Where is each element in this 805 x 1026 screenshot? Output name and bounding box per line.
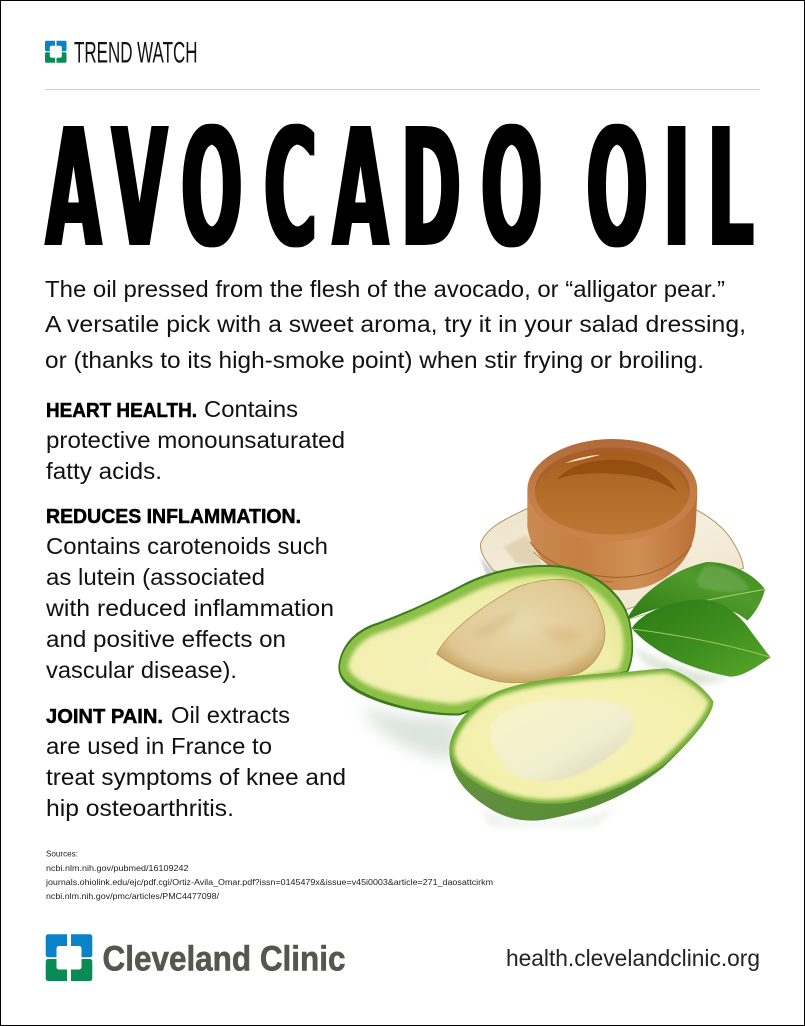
sources <box>45 848 493 901</box>
text block: heart health <box>46 396 345 484</box>
text block: heart health: Contains <box>204 396 298 422</box>
logo: Cleveland Clinic mark <box>46 933 92 982</box>
text block: heart health: fatty acids. <box>46 458 162 484</box>
intro text: The oil pressed from the flesh of the avocado, or “alligator pear.” <box>45 276 725 302</box>
avocado half with empty pit <box>449 669 713 821</box>
avocado half with seed <box>338 565 633 715</box>
text block: reduces inflammation: REDUCES INFLAMMATION. <box>46 505 301 528</box>
text block: joint pain: Oil extracts <box>171 702 290 728</box>
text block: reduces inflammation <box>45 505 334 683</box>
sources: ncbi.nlm.nih.gov/pubmed/16109242 <box>46 863 189 873</box>
wooden bowl <box>527 439 697 590</box>
text block: reduces inflammation: with reduced inflammation <box>45 595 334 621</box>
text block: reduces inflammation: as lutein (associated <box>46 564 265 590</box>
title: AVOCADO OIL <box>46 93 753 286</box>
sources: ncbi.nlm.nih.gov/pmc/articles/PMC4477098/ <box>46 891 220 901</box>
text block: joint pain: are used in France to <box>46 733 272 759</box>
intro text: A versatile pick with a sweet aroma, try it in your salad dressing, <box>45 311 746 337</box>
text block: heart health: HEART HEALTH. <box>46 399 197 422</box>
wood slice <box>481 507 743 612</box>
icon: small Cleveland Clinic mark <box>45 40 66 64</box>
logo: Cleveland Clinic wordmark: Cleveland Clinic <box>102 940 346 978</box>
text block: joint pain <box>46 702 346 821</box>
heading: trend watch: TREND WATCH <box>74 36 198 70</box>
leaves <box>627 562 771 677</box>
text block: joint pain: hip osteoarthritis. <box>46 795 234 821</box>
text block: joint pain: treat symptoms of knee and <box>46 764 346 790</box>
illustration: avocados, oil bowl and leaves <box>338 439 771 827</box>
intro text: or (thanks to its high-smoke point) when stir frying or broiling. <box>45 347 704 373</box>
text block: heart health: protective monounsaturated <box>46 427 345 453</box>
text block: reduces inflammation: vascular disease). <box>46 657 237 683</box>
text block: joint pain: JOINT PAIN. <box>46 705 163 728</box>
sources: Sources: <box>46 848 78 858</box>
shadows <box>360 557 730 827</box>
sources: journals.ohiolink.edu/ejc/pdf.cgi/Ortiz-Avila_Omar.pdf?issn=0145479x&issue=v45i0003&article=271_daosattcirkm <box>45 877 493 887</box>
text block: reduces inflammation: Contains carotenoids such <box>46 533 328 559</box>
website url: health.clevelandclinic.org <box>506 945 760 971</box>
intro text <box>45 276 746 373</box>
text block: reduces inflammation: and positive effects on <box>46 626 286 652</box>
